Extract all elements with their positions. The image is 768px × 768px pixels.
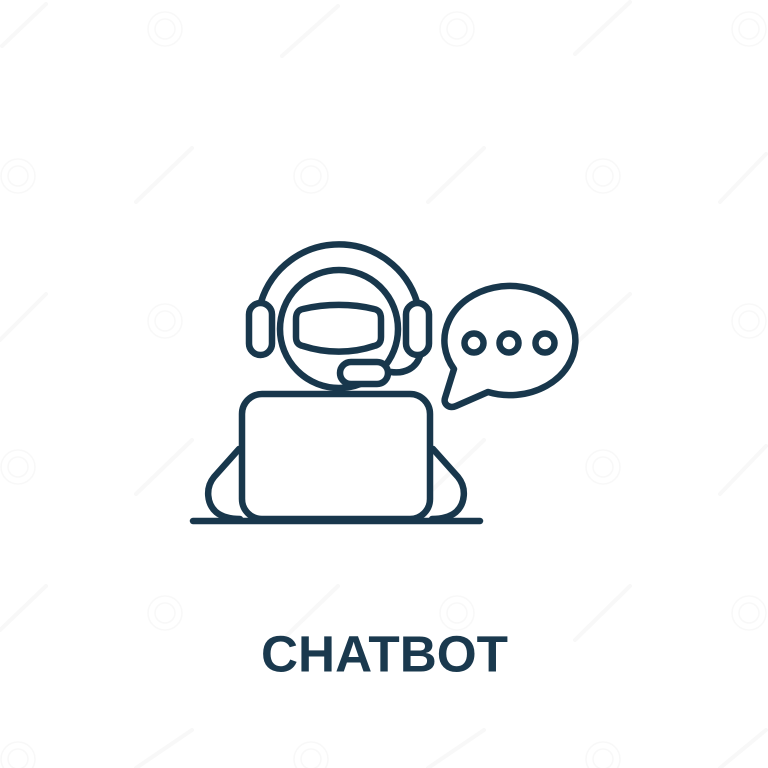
icon: robot head	[280, 270, 398, 388]
icon: right arm	[432, 449, 464, 519]
title: CHATBOT	[261, 626, 508, 682]
icon: typing dot 1	[464, 334, 484, 352]
icon: speech bubble	[444, 286, 575, 407]
icon: left ear cup	[249, 303, 272, 355]
icon: desk line	[193, 518, 480, 524]
icon: right ear cup	[406, 303, 429, 355]
icon: typing dot 3	[536, 334, 554, 352]
icon: chatbot at laptop with speech bubble	[193, 244, 575, 521]
icon: headset band	[261, 244, 417, 302]
icon: microphone wire	[391, 356, 420, 372]
icon: left arm	[208, 449, 240, 519]
icon: laptop	[242, 394, 430, 519]
icon: microphone	[340, 362, 388, 384]
icon: typing dot 2	[500, 334, 518, 352]
icon: robot visor	[296, 305, 381, 352]
